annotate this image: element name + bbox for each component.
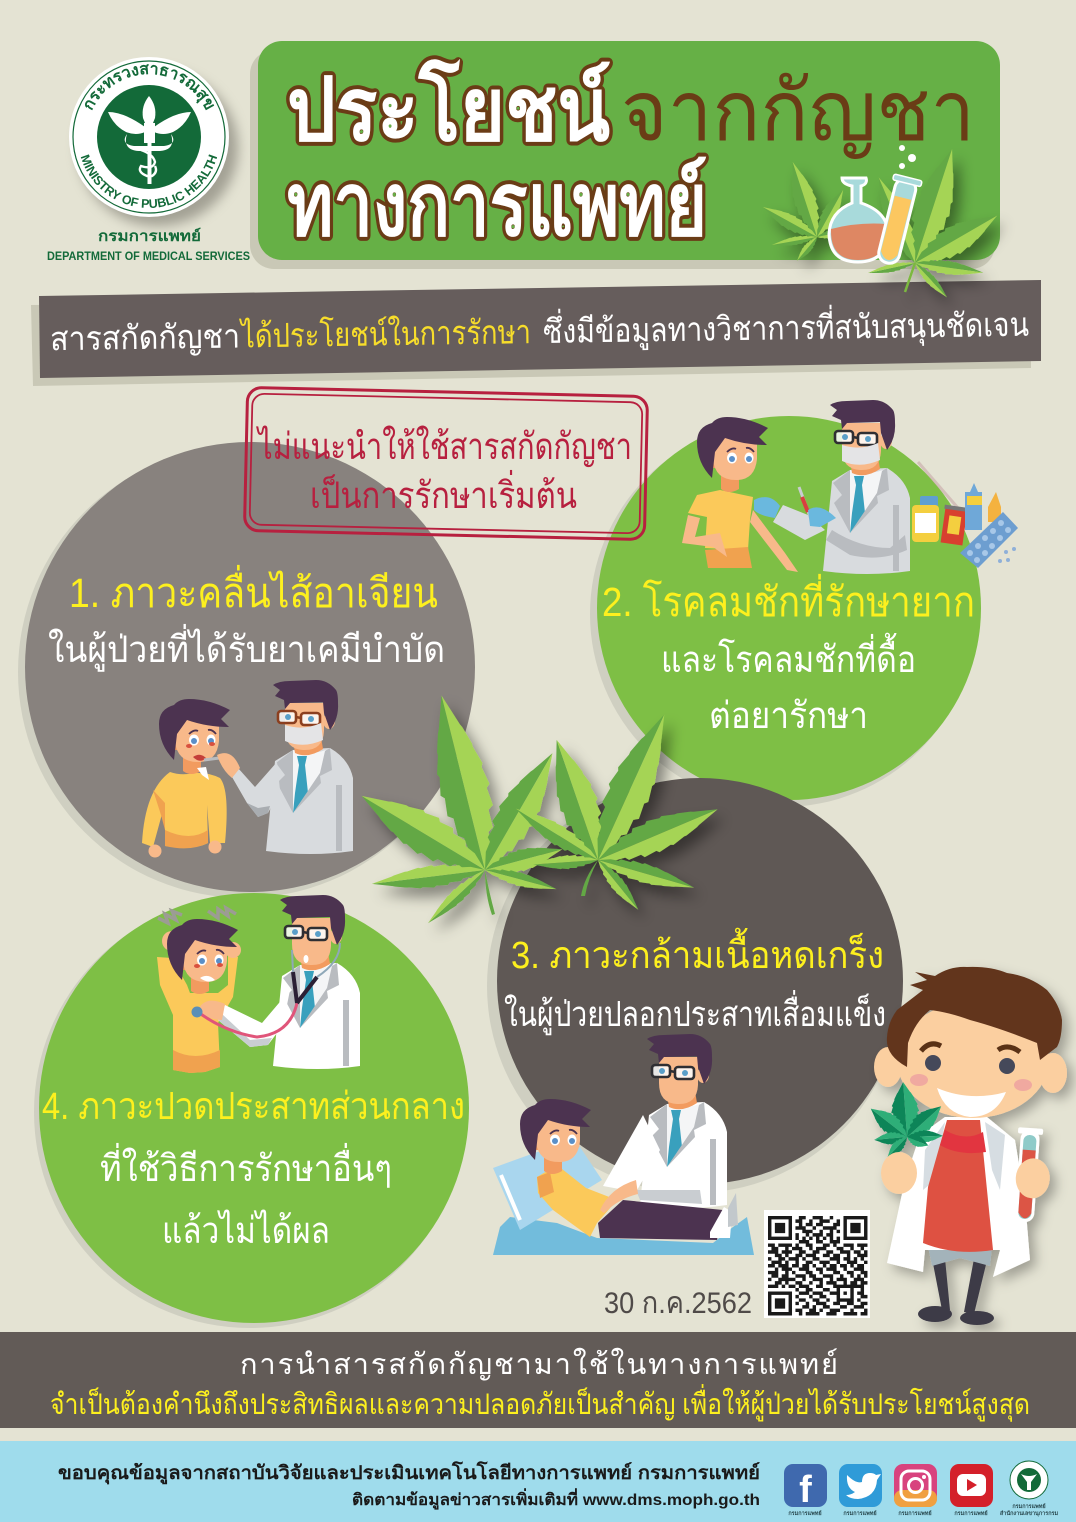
test tube in hand — [1012, 1127, 1053, 1223]
icon: facebook: f — [799, 1469, 812, 1511]
department name — [47, 227, 250, 263]
heading 2: 2. โรคลมชักที่รักษายาก — [602, 574, 975, 625]
head — [874, 967, 1067, 1118]
heading 1: 1. ภาวะคลื่นไส้อาเจียน — [69, 565, 438, 616]
lab coat and shirt — [887, 1117, 1030, 1277]
tiny icon captions: กรมการแพทย์ — [898, 1510, 932, 1517]
banner text — [50, 302, 1029, 359]
panel 1: nausea — [18, 442, 475, 898]
icon: ministry seal — [1010, 1461, 1048, 1499]
message heading: การนำสารสกัดกัญชามาใช้ในทางการแพทย์ — [240, 1347, 838, 1381]
title panel — [250, 41, 1000, 269]
tiny icon captions: กรมการแพทย์ — [954, 1510, 988, 1517]
icon: facebook — [784, 1464, 827, 1511]
illustration: doctor with stethoscope and patient with headache — [157, 895, 360, 1073]
legs and shoes — [918, 1246, 994, 1325]
small cannabis leaves — [759, 143, 1005, 301]
footer band — [0, 1441, 1076, 1522]
tiny icon captions: กรมการแพทย์ — [1012, 1503, 1046, 1510]
panel 4: central neuropathic pain — [34, 893, 469, 1328]
logo: Ministry of Public Health — [69, 57, 245, 233]
warning stamp — [244, 387, 648, 540]
bottom message band — [0, 1332, 1076, 1428]
description 4: แล้วไม่ได้ผล — [162, 1209, 330, 1251]
description 2: ต่อยารักษา — [709, 695, 868, 736]
credit text: ขอบคุณข้อมูลจากสถาบันวิจัยและประเมินเทคโนโลยีทางการแพทย์ กรมการแพทย์ — [58, 1461, 760, 1485]
heading 3: 3. ภาวะกล้ามเนื้อหดเกร็ง — [511, 927, 884, 977]
test tube — [873, 174, 922, 266]
tiny icon captions — [788, 1503, 1058, 1517]
department name: DEPARTMENT OF MEDICAL SERVICES — [47, 249, 250, 263]
illustration: doctor examining nauseous patient — [142, 680, 353, 858]
stamp text: ไม่แนะนำให้ใช้สารสกัดกัญชา — [256, 425, 632, 468]
description 4 — [100, 1142, 392, 1251]
banner text: สารสกัดกัญชา — [50, 317, 240, 357]
leaf in hand — [865, 1081, 948, 1194]
banner text: ได้ประโยชน์ในการรักษา — [238, 313, 531, 354]
tiny icon captions: กรมการแพทย์ — [843, 1510, 877, 1517]
tiny icon captions: สำนักงานเลขานุการกรม — [1000, 1510, 1058, 1517]
description 3: ในผู้ป่วยปลอกประสาทเสื่อมแข็ง — [504, 990, 886, 1035]
heading 4: 4. ภาวะปวดประสาทส่วนกลาง — [42, 1086, 465, 1128]
cannabis leaves centre — [351, 689, 724, 928]
panel 3: muscle spasticity — [487, 778, 903, 1255]
right leaf — [510, 705, 724, 914]
icon: instagram — [894, 1464, 937, 1507]
logo: Ministry of Public Health: กระทรวงสาธารณสุข — [85, 64, 214, 110]
description 1: ในผู้ป่วยที่ได้รับยาเคมีบำบัด — [48, 623, 445, 672]
description 2: และโรคลมชักที่ดื้อ — [661, 632, 916, 680]
panel 2: epilepsy — [590, 400, 1018, 807]
illustration: medicines — [912, 462, 1018, 568]
icon: cannabis leaves and lab glassware — [759, 143, 1005, 301]
date: 30 ก.ค.2562 — [604, 1287, 752, 1320]
icon: twitter — [839, 1464, 882, 1507]
department name: กรมการแพทย์ — [98, 227, 201, 245]
illustration: doctor with patient in bed — [493, 1034, 754, 1255]
emblem: winged torch and caduceus — [108, 96, 191, 184]
icon: youtube — [950, 1464, 993, 1507]
banner — [31, 280, 1041, 386]
logo: Ministry of Public Health: MINISTRY OF PUBLIC HEALTH — [80, 154, 218, 208]
title: benefits of cannabis — [287, 59, 975, 254]
flask — [829, 178, 888, 262]
stamp text — [256, 425, 632, 516]
title: benefits of cannabis: จากกัญชา — [621, 64, 975, 160]
QR code — [764, 1210, 870, 1318]
description 4: ที่ใช้วิธีการรักษาอื่นๆ — [100, 1142, 392, 1189]
stamp text: เป็นการรักษาเริ่มต้น — [310, 469, 577, 516]
website text: ติดตามข้อมูลข่าวสารเพิ่มเติมที่ www.dms.moph.go.th — [352, 1488, 760, 1511]
title: benefits of cannabis: ประโยชน์ — [287, 59, 610, 159]
description 2 — [661, 632, 916, 736]
tiny icon captions: กรมการแพทย์ — [788, 1510, 822, 1517]
left leaf — [351, 689, 569, 928]
character: doctor holding leaf and test tube — [865, 967, 1067, 1325]
illustration: doctor injecting patient — [682, 400, 910, 574]
title: benefits of cannabis: ทางการแพทย์ — [287, 155, 707, 254]
